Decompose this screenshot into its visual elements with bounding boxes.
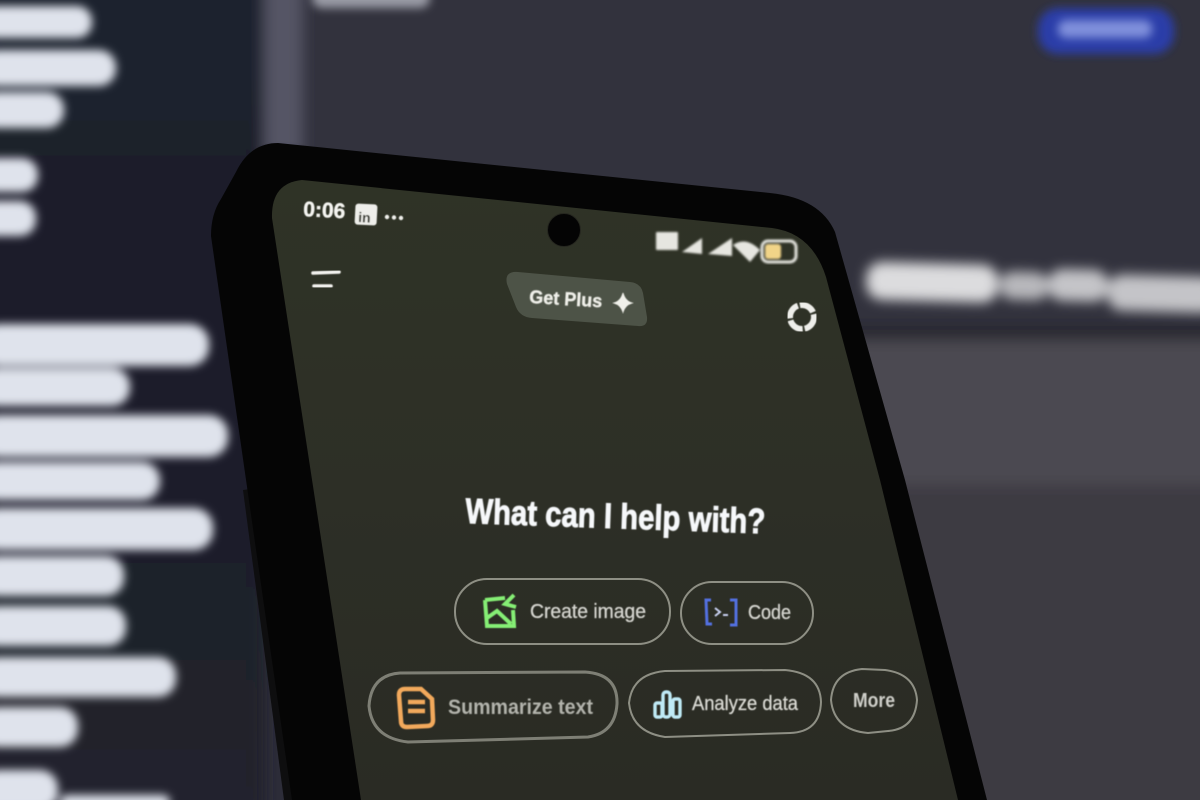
blurred text lines on monitor, left <box>0 6 228 800</box>
chip: create image <box>455 579 670 644</box>
chip: code <box>681 582 813 644</box>
phone side button <box>243 489 300 800</box>
phone <box>211 143 987 800</box>
phone body <box>211 143 987 800</box>
phone screen <box>272 180 958 800</box>
blurred heading on monitor, right <box>866 261 1200 313</box>
status bar: time and notifications: 0:06 <box>303 198 346 223</box>
chip: code: Code <box>748 602 791 624</box>
blurred blue button on monitor <box>1038 8 1174 54</box>
blurred top label on monitor <box>312 0 430 8</box>
overflow dots <box>385 215 403 220</box>
get plus button <box>506 272 647 326</box>
chip: more: More <box>853 690 895 712</box>
icon: document <box>399 689 433 727</box>
sparkle icon <box>614 293 632 312</box>
menu icon <box>313 272 339 286</box>
heading: What can I help with? <box>465 492 766 541</box>
status bar: signal, wifi, battery <box>656 232 796 262</box>
chip: create image: Create image <box>530 601 646 623</box>
profile ring icon <box>790 305 814 329</box>
camera punch hole <box>548 214 580 246</box>
chip: summarize text <box>369 672 617 742</box>
chip: more <box>831 669 917 733</box>
chip: summarize text: Summarize text <box>448 696 593 719</box>
icon: image <box>485 595 516 626</box>
get plus button: Get Plus <box>529 287 603 311</box>
icon: code brackets <box>706 600 736 625</box>
chip: analyze data <box>629 670 821 737</box>
status bar: time and notifications <box>303 198 403 226</box>
linkedin icon: in <box>358 209 371 226</box>
icon: bar chart <box>655 692 680 717</box>
chip: analyze data: Analyze data <box>692 693 799 715</box>
